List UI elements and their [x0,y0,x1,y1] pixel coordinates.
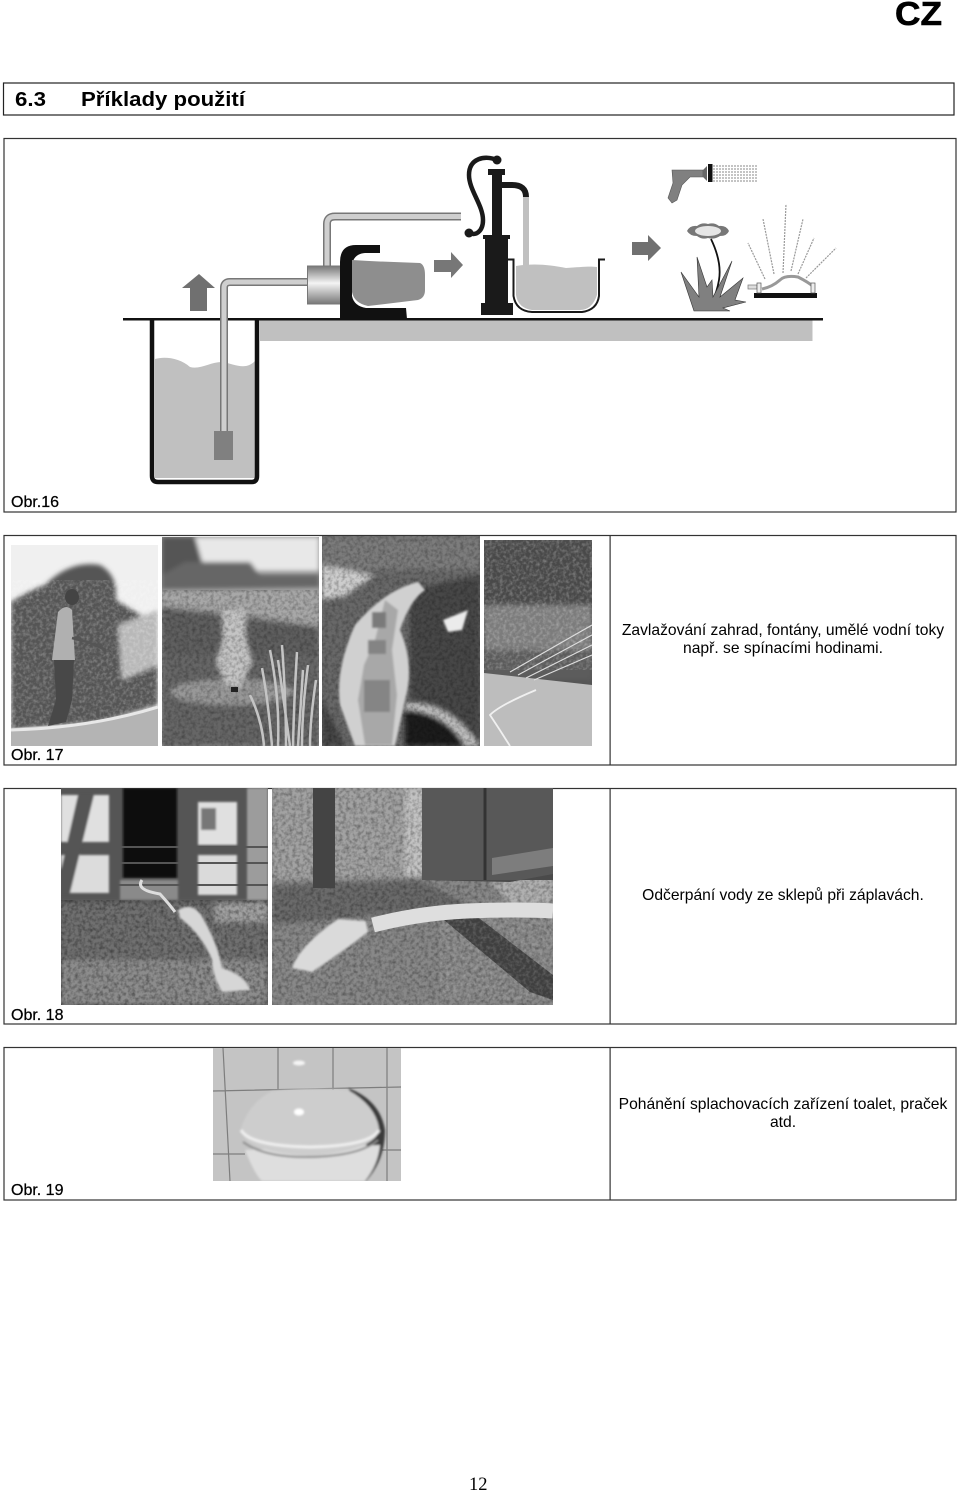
panel: Obr. 17 garden uses [4,536,956,765]
arrow: to garden [632,235,661,261]
spray gun [668,164,758,203]
section heading [4,83,954,115]
water column [523,197,529,267]
photo: hose on cobbles [272,788,553,1005]
description Obr. 19 [619,1096,948,1131]
ground slab [260,320,812,341]
ground line [123,318,823,320]
reeds [250,645,316,746]
caption Obr.16: Obr.16 [11,494,59,511]
description Obr. 17 [622,622,944,657]
photo: lawn sprinkler [484,540,592,746]
hose [373,910,553,925]
panel: Obr. 16 pump diagram [4,138,956,512]
caption Obr. 19: Obr. 19 [11,1182,64,1199]
garden pump [308,245,425,319]
section heading: 6.3 [15,89,46,111]
caption Obr. 18: Obr. 18 [11,1007,64,1024]
arrow: up [182,274,215,311]
section heading: Příklady použití [81,89,247,111]
description Obr. 18: Odčerpání vody ze sklepů při záplavách. [642,886,924,904]
hand pump [464,156,526,315]
description Obr. 19: Pohánění splachovacích zařízení toalet, praček [619,1096,948,1113]
photo: stream cascade [322,536,480,746]
water jet [178,907,250,992]
photo: man watering hedge [11,545,158,746]
photo: toilet [213,1048,401,1181]
description Obr. 17: např. se spínacími hodinami. [683,640,883,657]
photo: pond fountain [162,537,319,746]
drain grating [444,915,553,1000]
flower [681,223,746,311]
bucket [507,260,605,312]
photo: house door with hose [61,788,268,1005]
suction pipe [224,282,308,432]
water spray [292,919,368,972]
person [48,589,106,726]
arrow: to hand pump [434,252,463,278]
description Obr. 19: atd. [770,1114,796,1131]
panel: Obr. 18 flood pumping [4,788,956,1024]
submerged pump [214,431,233,460]
description Obr. 17: Zavlažování zahrad, fontány, umělé vodní toky [622,622,944,639]
well with water [152,319,257,482]
delivery pipe [327,216,461,266]
panel: Obr. 19 toilet flushing [4,1048,956,1200]
caption Obr. 17: Obr. 17 [11,747,64,764]
sprinkler [748,204,836,298]
